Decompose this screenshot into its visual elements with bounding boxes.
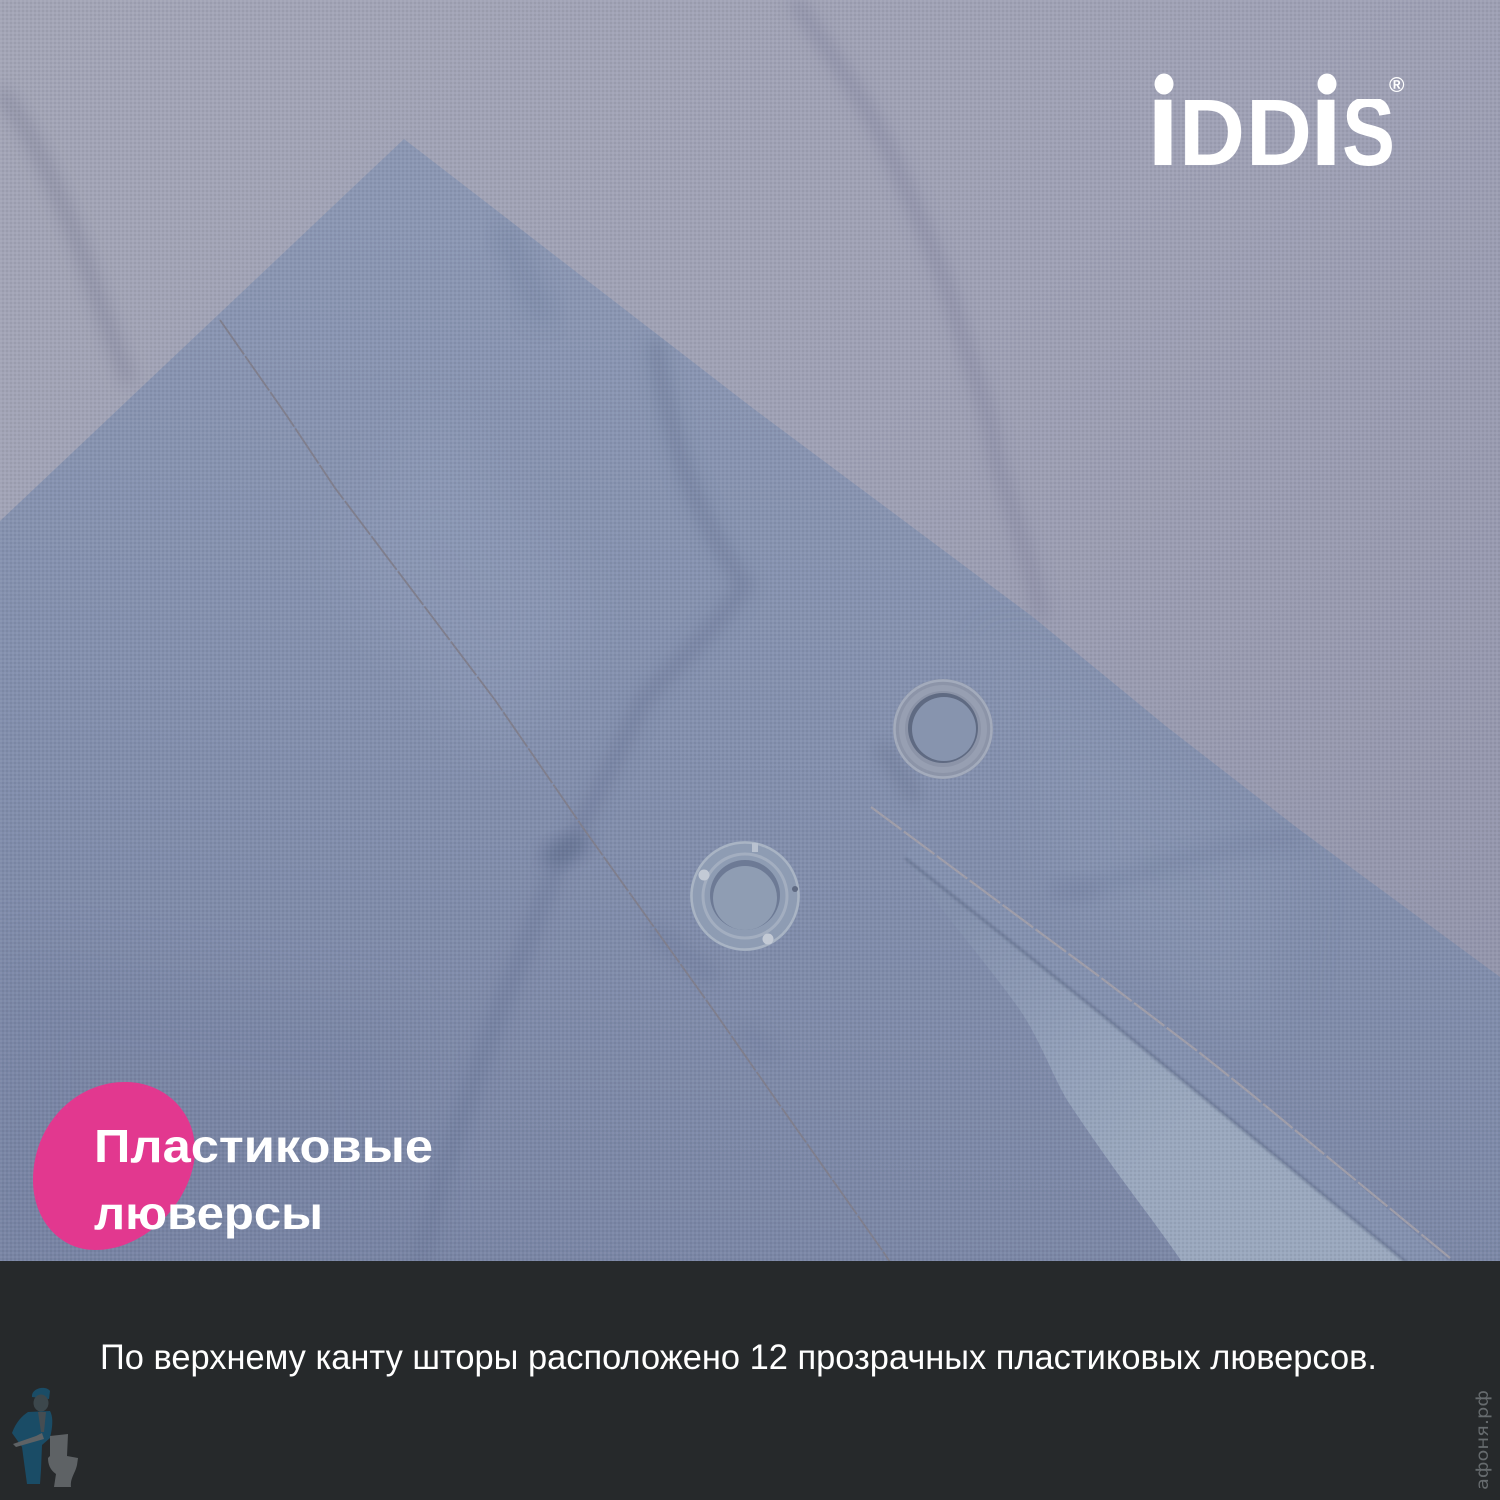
logo: IDDIS: i bbox=[1309, 55, 1343, 192]
eyelet: upper plastic grommet bbox=[893, 679, 993, 779]
logo: IDDIS: S bbox=[1342, 77, 1395, 186]
light underside wedge bbox=[984, 944, 1404, 1261]
back fabric layer bbox=[0, 0, 1500, 977]
side stitching bbox=[220, 320, 890, 1262]
watermark: афоня.рф bbox=[1473, 1390, 1493, 1490]
eyelet: lower plastic grommet bbox=[690, 841, 800, 951]
logo: IDDIS bbox=[1154, 74, 1404, 166]
hem fold edge bbox=[905, 840, 1450, 1262]
pink accent blob bbox=[33, 1082, 195, 1250]
logo: IDDIS: D bbox=[1246, 80, 1312, 186]
heading: люверсы bbox=[94, 1187, 323, 1239]
front fabric fold bbox=[0, 139, 1500, 1265]
hem stitching bbox=[871, 807, 1450, 1258]
description text: По верхнему канту шторы расположено 12 прозрачных пластиковых люверсов. bbox=[100, 1338, 1377, 1377]
icon: plumber with toilet bbox=[12, 1388, 78, 1487]
bottom band bbox=[0, 1261, 1500, 1500]
logo: IDDIS: ® bbox=[1389, 74, 1405, 97]
heading: Пластиковые bbox=[94, 1120, 433, 1172]
logo: IDDIS: i bbox=[1146, 55, 1180, 192]
logo: IDDIS: D bbox=[1179, 80, 1245, 186]
